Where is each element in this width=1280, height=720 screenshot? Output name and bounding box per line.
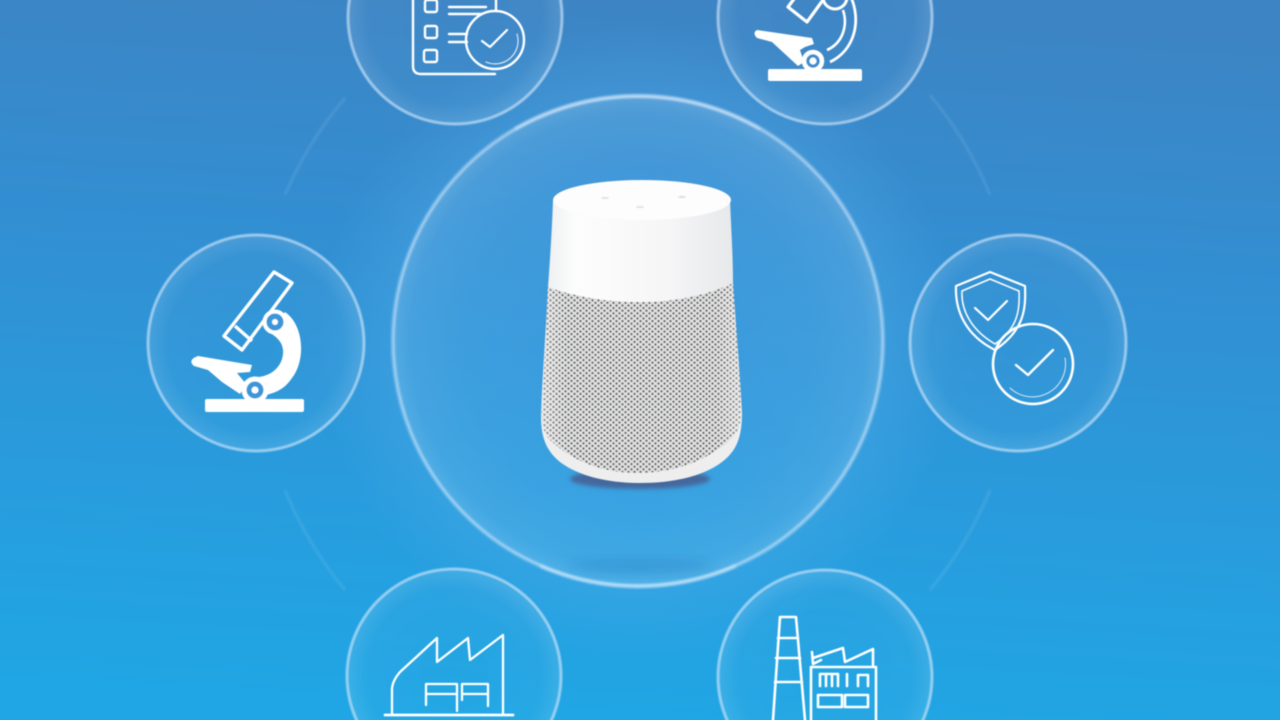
speaker lower shell <box>541 283 742 483</box>
central glow circle <box>318 21 958 661</box>
speaker shadow <box>570 469 710 489</box>
speaker top surface <box>553 180 731 220</box>
bubble: factory <box>347 569 561 720</box>
mesh edge highlight <box>542 283 741 473</box>
icon: chimney plant <box>773 617 876 720</box>
icon: microscope large <box>191 272 304 412</box>
smart speaker <box>541 180 742 483</box>
bubble: chimney plant <box>718 570 932 720</box>
icon: checklist <box>413 0 524 74</box>
bubble: microscope top <box>718 0 932 124</box>
icon: shield and check <box>956 272 1073 404</box>
bubble: checklist <box>348 0 562 124</box>
touch indicators <box>601 196 686 208</box>
speaker reflection <box>568 558 712 574</box>
speaker upper shell <box>548 200 733 302</box>
icon: factory <box>385 635 513 715</box>
bubble: shield and check <box>910 235 1126 451</box>
bubble: microscope left <box>148 235 364 451</box>
speaker mesh <box>542 283 741 473</box>
icon: microscope small <box>754 0 862 81</box>
orbit ring arcs <box>285 95 990 590</box>
